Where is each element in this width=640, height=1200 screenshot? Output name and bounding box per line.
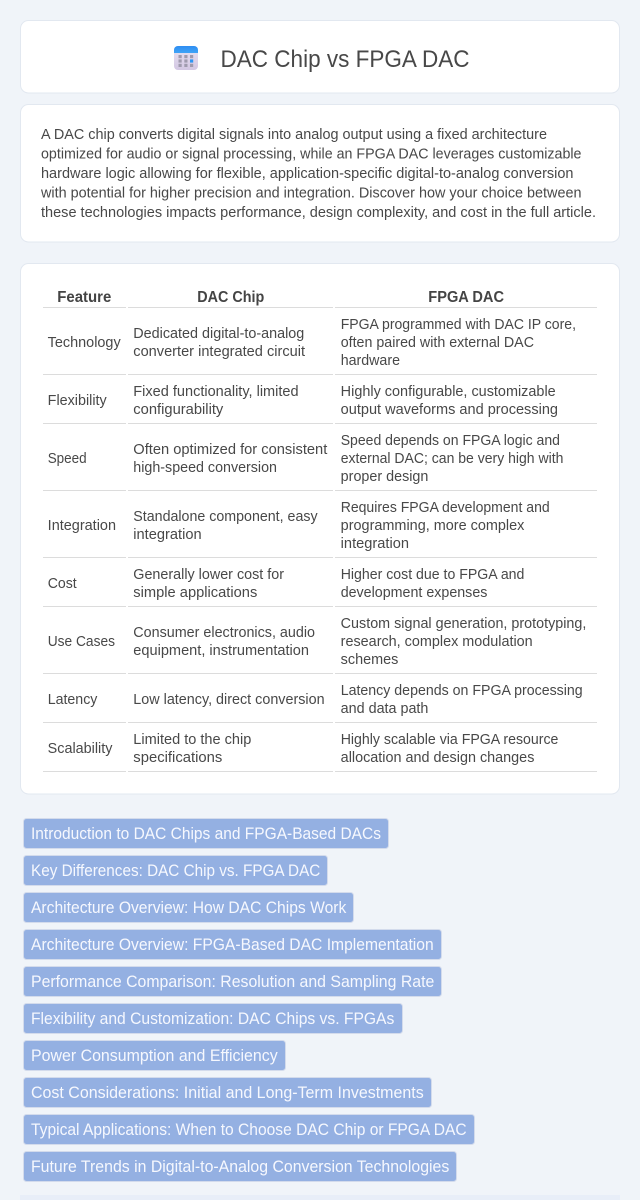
text block: introduction bbox=[40, 127, 596, 221]
row: Cost: simple applications bbox=[133, 585, 257, 601]
row: Cost bbox=[48, 567, 524, 601]
link: performance: Performance Comparison: Resolution and Sampling Rate bbox=[31, 973, 434, 991]
link: key differences bbox=[24, 856, 328, 886]
row: Technology: Dedicated digital-to-analog bbox=[133, 326, 304, 342]
link: architecture DAC chips bbox=[24, 892, 354, 922]
row: Speed bbox=[48, 433, 563, 485]
row: Integration: Standalone component, easy bbox=[133, 509, 318, 525]
link: cost: Cost Considerations: Initial and Long-Term Investments bbox=[31, 1084, 424, 1102]
row: Flexibility: Highly configurable, customizable bbox=[341, 384, 556, 400]
row: Speed: Speed depends on FPGA logic and bbox=[341, 433, 560, 449]
link: applications: Typical Applications: When to Choose DAC Chip or FPGA DAC bbox=[31, 1121, 467, 1139]
row: Use Cases: schemes bbox=[341, 652, 398, 668]
row: Use Cases bbox=[48, 616, 586, 668]
row: Technology: hardware bbox=[341, 353, 400, 369]
panel: comparison table bbox=[20, 264, 620, 794]
row: Speed: external DAC; can be very high with bbox=[341, 451, 563, 467]
link: future trends bbox=[24, 1152, 456, 1182]
row: Speed: Often optimized for consistent bbox=[133, 442, 327, 458]
row: Use Cases: Use Cases bbox=[48, 634, 115, 650]
text block: introduction: optimized for audio or signal processing, while an FPGA DAC leverages customizable bbox=[41, 146, 582, 162]
panel: footer strip bbox=[20, 1195, 620, 1200]
link: flexibility: Flexibility and Customization: DAC Chips vs. FPGAs bbox=[31, 1010, 394, 1028]
icon: calendar chip bbox=[174, 46, 198, 70]
row: Flexibility: Flexibility bbox=[48, 393, 108, 409]
text block: introduction: A DAC chip converts digital signals into analog output using a fixed architecture bbox=[41, 127, 547, 143]
text block: introduction: hardware logic allowing for flexible, application-specific digital-to-analog conversion bbox=[41, 166, 574, 182]
link: power: Power Consumption and Efficiency bbox=[31, 1047, 278, 1065]
link: introduction: Introduction to DAC Chips and FPGA-Based DACs bbox=[31, 825, 381, 843]
row: Speed: high-speed conversion bbox=[133, 460, 277, 476]
row: Integration bbox=[48, 500, 550, 552]
row: Cost: Generally lower cost for bbox=[133, 567, 284, 583]
link: power bbox=[24, 1040, 286, 1070]
row: Cost: development expenses bbox=[341, 585, 487, 601]
row: Flexibility: Fixed functionality, limited bbox=[133, 384, 299, 400]
row: Technology: often paired with external DAC bbox=[341, 335, 534, 351]
table header: Feature bbox=[57, 289, 112, 306]
table header: DAC Chip bbox=[197, 289, 264, 306]
row: Integration: integration bbox=[341, 536, 409, 552]
title: DAC Chip vs FPGA DAC bbox=[220, 46, 470, 73]
row: Scalability: allocation and design changes bbox=[341, 750, 534, 766]
row: Scalability: Scalability bbox=[48, 741, 113, 757]
row: Flexibility: configurability bbox=[133, 402, 224, 418]
row: Flexibility: output waveforms and processing bbox=[341, 402, 558, 418]
row: Technology: Technology bbox=[48, 335, 122, 351]
row: Latency: and data path bbox=[341, 701, 428, 717]
row: Speed: Speed bbox=[48, 451, 87, 467]
link: applications bbox=[24, 1114, 474, 1144]
table header: FPGA DAC bbox=[428, 289, 504, 306]
row: Cost: Higher cost due to FPGA and bbox=[341, 567, 524, 583]
link: architecture FPGA: Architecture Overview: FPGA-Based DAC Implementation bbox=[31, 936, 434, 954]
row: Scalability: Highly scalable via FPGA resource bbox=[341, 732, 558, 748]
row: Latency bbox=[48, 683, 583, 717]
row: Scalability: Limited to the chip bbox=[133, 732, 251, 748]
link: cost bbox=[24, 1078, 432, 1108]
row: Use Cases: research, complex modulation bbox=[341, 634, 533, 650]
text block: introduction: these technologies impacts performance, design complexity, and cost in the full article. bbox=[41, 205, 596, 221]
panel: header bbox=[20, 20, 620, 93]
row: Use Cases: Custom signal generation, prototyping, bbox=[341, 616, 586, 632]
row: Integration: Requires FPGA development and bbox=[341, 500, 550, 516]
row: Cost: Cost bbox=[48, 576, 77, 592]
row: Speed: proper design bbox=[341, 469, 428, 485]
row: Scalability: specifications bbox=[133, 750, 222, 766]
row: Flexibility bbox=[48, 384, 558, 418]
row: Latency: Latency depends on FPGA processing bbox=[341, 683, 583, 699]
link: future trends: Future Trends in Digital-to-Analog Conversion Technologies bbox=[31, 1158, 449, 1176]
row: Technology: FPGA programmed with DAC IP core, bbox=[341, 317, 576, 333]
row: Technology: converter integrated circuit bbox=[133, 344, 305, 360]
row: Integration: programming, more complex bbox=[341, 518, 524, 534]
link: introduction bbox=[24, 818, 388, 848]
row: Use Cases: equipment, instrumentation bbox=[133, 643, 309, 659]
row: Integration: Integration bbox=[48, 518, 116, 534]
row: Scalability bbox=[48, 732, 558, 766]
table header bbox=[57, 289, 504, 306]
link: performance bbox=[24, 966, 442, 996]
panel: table of contents links bbox=[24, 818, 474, 1182]
link: architecture DAC chips: Architecture Overview: How DAC Chips Work bbox=[31, 899, 347, 917]
row: Technology bbox=[48, 317, 576, 369]
link: flexibility bbox=[24, 1004, 402, 1034]
row: Use Cases: Consumer electronics, audio bbox=[133, 625, 315, 641]
text block: introduction: with potential for higher precision and integration. Discover how your choice between bbox=[40, 186, 582, 202]
row: Latency: Low latency, direct conversion bbox=[133, 692, 325, 708]
panel: introduction bbox=[20, 104, 620, 242]
link: key differences: Key Differences: DAC Chip vs. FPGA DAC bbox=[31, 862, 320, 880]
row: Integration: integration bbox=[133, 527, 202, 543]
row: Latency: Latency bbox=[48, 692, 98, 708]
link: architecture FPGA bbox=[24, 930, 442, 960]
